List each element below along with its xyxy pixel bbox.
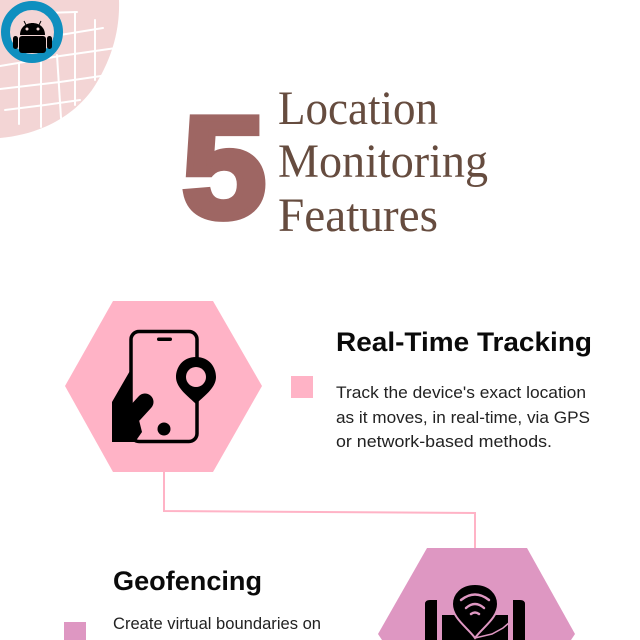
decorative corner blob with grid [0, 0, 119, 138]
square marker 2 [64, 622, 86, 640]
title text: Location [278, 82, 438, 135]
icon: hand holding phone with location pin [112, 332, 216, 442]
text block: real-time tracking [336, 384, 590, 451]
text block: geofencing: Create virtual boundaries on [113, 615, 321, 633]
title [182, 82, 488, 248]
panel: real-time tracking hexagon [65, 301, 262, 472]
connector line between hexagons [164, 472, 475, 548]
text block: real-time tracking: Track the device's exact location [336, 384, 586, 402]
icon: map with wifi pin [425, 584, 525, 640]
title text [278, 82, 488, 242]
text block: real-time tracking: as it moves, in real-time, via GPS [336, 409, 590, 427]
panel: geofencing hexagon [378, 548, 575, 640]
heading: real-time tracking: Real-Time Tracking [336, 327, 592, 357]
title text: Monitoring [278, 135, 488, 188]
icon: android robot [13, 21, 52, 53]
title text: Features [278, 189, 438, 242]
badge: android logo [6, 6, 58, 58]
text block: real-time tracking: or network-based methods. [336, 433, 552, 451]
square marker 1 [291, 376, 313, 398]
big number 5: 5 [182, 87, 266, 248]
heading: geofencing: Geofencing [113, 566, 262, 596]
